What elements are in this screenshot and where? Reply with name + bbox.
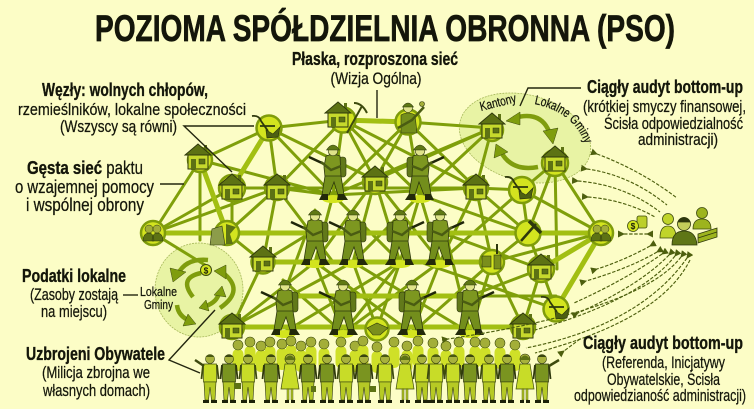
leader: armed citizens: [169, 310, 215, 373]
icon: hammer: [521, 221, 541, 241]
label: nodes: Węzły: wolnych chłopów,: [42, 80, 208, 100]
label: dense network: i wspólnej obrony: [26, 195, 144, 215]
label: local taxes: (Zasoby zostają: [30, 285, 118, 304]
icon: money stack: [698, 228, 717, 243]
icons: houses: [185, 102, 568, 338]
panel: left circle Lokalne Gminy: [155, 243, 243, 337]
icon: coin: [200, 264, 212, 276]
arrowheads: left circular flow: [170, 265, 226, 326]
icon: tools node: [482, 244, 501, 269]
icon: coins: $: [631, 222, 636, 231]
network links: [153, 120, 601, 333]
leader: local taxes: [123, 294, 138, 296]
thick links: [153, 120, 601, 327]
label: armed citizens: własnych domach): [42, 381, 150, 400]
dashed audit arrows: upper: [578, 154, 677, 217]
label: flat network: (Wizja Ogólna): [330, 69, 422, 88]
leader: flat network: [376, 90, 378, 118]
arrow: two-way coins: [624, 233, 647, 235]
soldiers: [261, 145, 494, 338]
icon: handshake: [367, 323, 388, 335]
label: Lokalne Gminy curved: Lokalne Gminy: [535, 95, 592, 142]
label: nodes: (Wszyscy są równi): [60, 117, 177, 136]
icon: citizen left: [660, 214, 676, 238]
icons: plows: [252, 116, 569, 319]
leader: audit top: [520, 88, 581, 106]
icon: worker node: [210, 224, 236, 245]
label: armed citizens: [26, 344, 165, 400]
label: Kantony: Kantony: [478, 90, 518, 114]
label: dense network: o wzajemnej pomocy: [15, 177, 154, 197]
audit group: [624, 208, 717, 245]
icon: official: [672, 218, 697, 245]
label: dense network: [15, 158, 154, 215]
label: local taxes: Podatki lokalne: [22, 266, 126, 286]
dashed audit arrows: lower: [448, 246, 690, 353]
crowd: back row: [232, 336, 520, 373]
label: nodes: [18, 80, 246, 136]
label: left circle municipalities: Lokalne: [140, 284, 177, 299]
arrowheads: right circular flow: [494, 112, 558, 158]
label: flat network: Płaska, rozproszona sieć: [292, 49, 458, 69]
icon: people node left: [143, 225, 163, 241]
label: audit bottom: Obywatelskie, Ścisła: [607, 370, 721, 389]
label: local taxes: [22, 266, 126, 321]
arrows: left circular flow: [177, 260, 234, 321]
leader: nodes: [184, 126, 254, 172]
leader: dense network: [160, 183, 184, 185]
label: left circle municipalities: Gminy: [144, 297, 173, 312]
label: audit top: [583, 77, 746, 149]
icon: citizen right: [693, 208, 711, 229]
panel: right ellipse Kantony and Lokalne Gminy: [449, 79, 601, 197]
icon: soldier bust in top node: [398, 102, 424, 133]
label: nodes: rzemieślników, lokalne społeczności: [18, 100, 246, 119]
label: left circle municipalities: [140, 284, 177, 312]
crowd: front row: [195, 354, 559, 403]
label: local taxes: na miejscu): [41, 302, 107, 321]
arrows: right circular flow: [501, 116, 550, 168]
icon: people node right: [591, 225, 611, 241]
label: audit bottom: [574, 333, 746, 405]
icon: pickaxe top: [347, 103, 367, 133]
label: audit top: administracji): [638, 131, 718, 149]
label: dense network: Gęsta sieć paktu: [27, 158, 143, 178]
nodes: [141, 108, 613, 340]
label: armed citizens: (Milicja zbrojna we: [42, 363, 150, 382]
label: flat network: [292, 49, 458, 88]
label: armed citizens: Uzbrojeni Obywatele: [26, 344, 165, 364]
icon: coin: $: [204, 266, 209, 276]
